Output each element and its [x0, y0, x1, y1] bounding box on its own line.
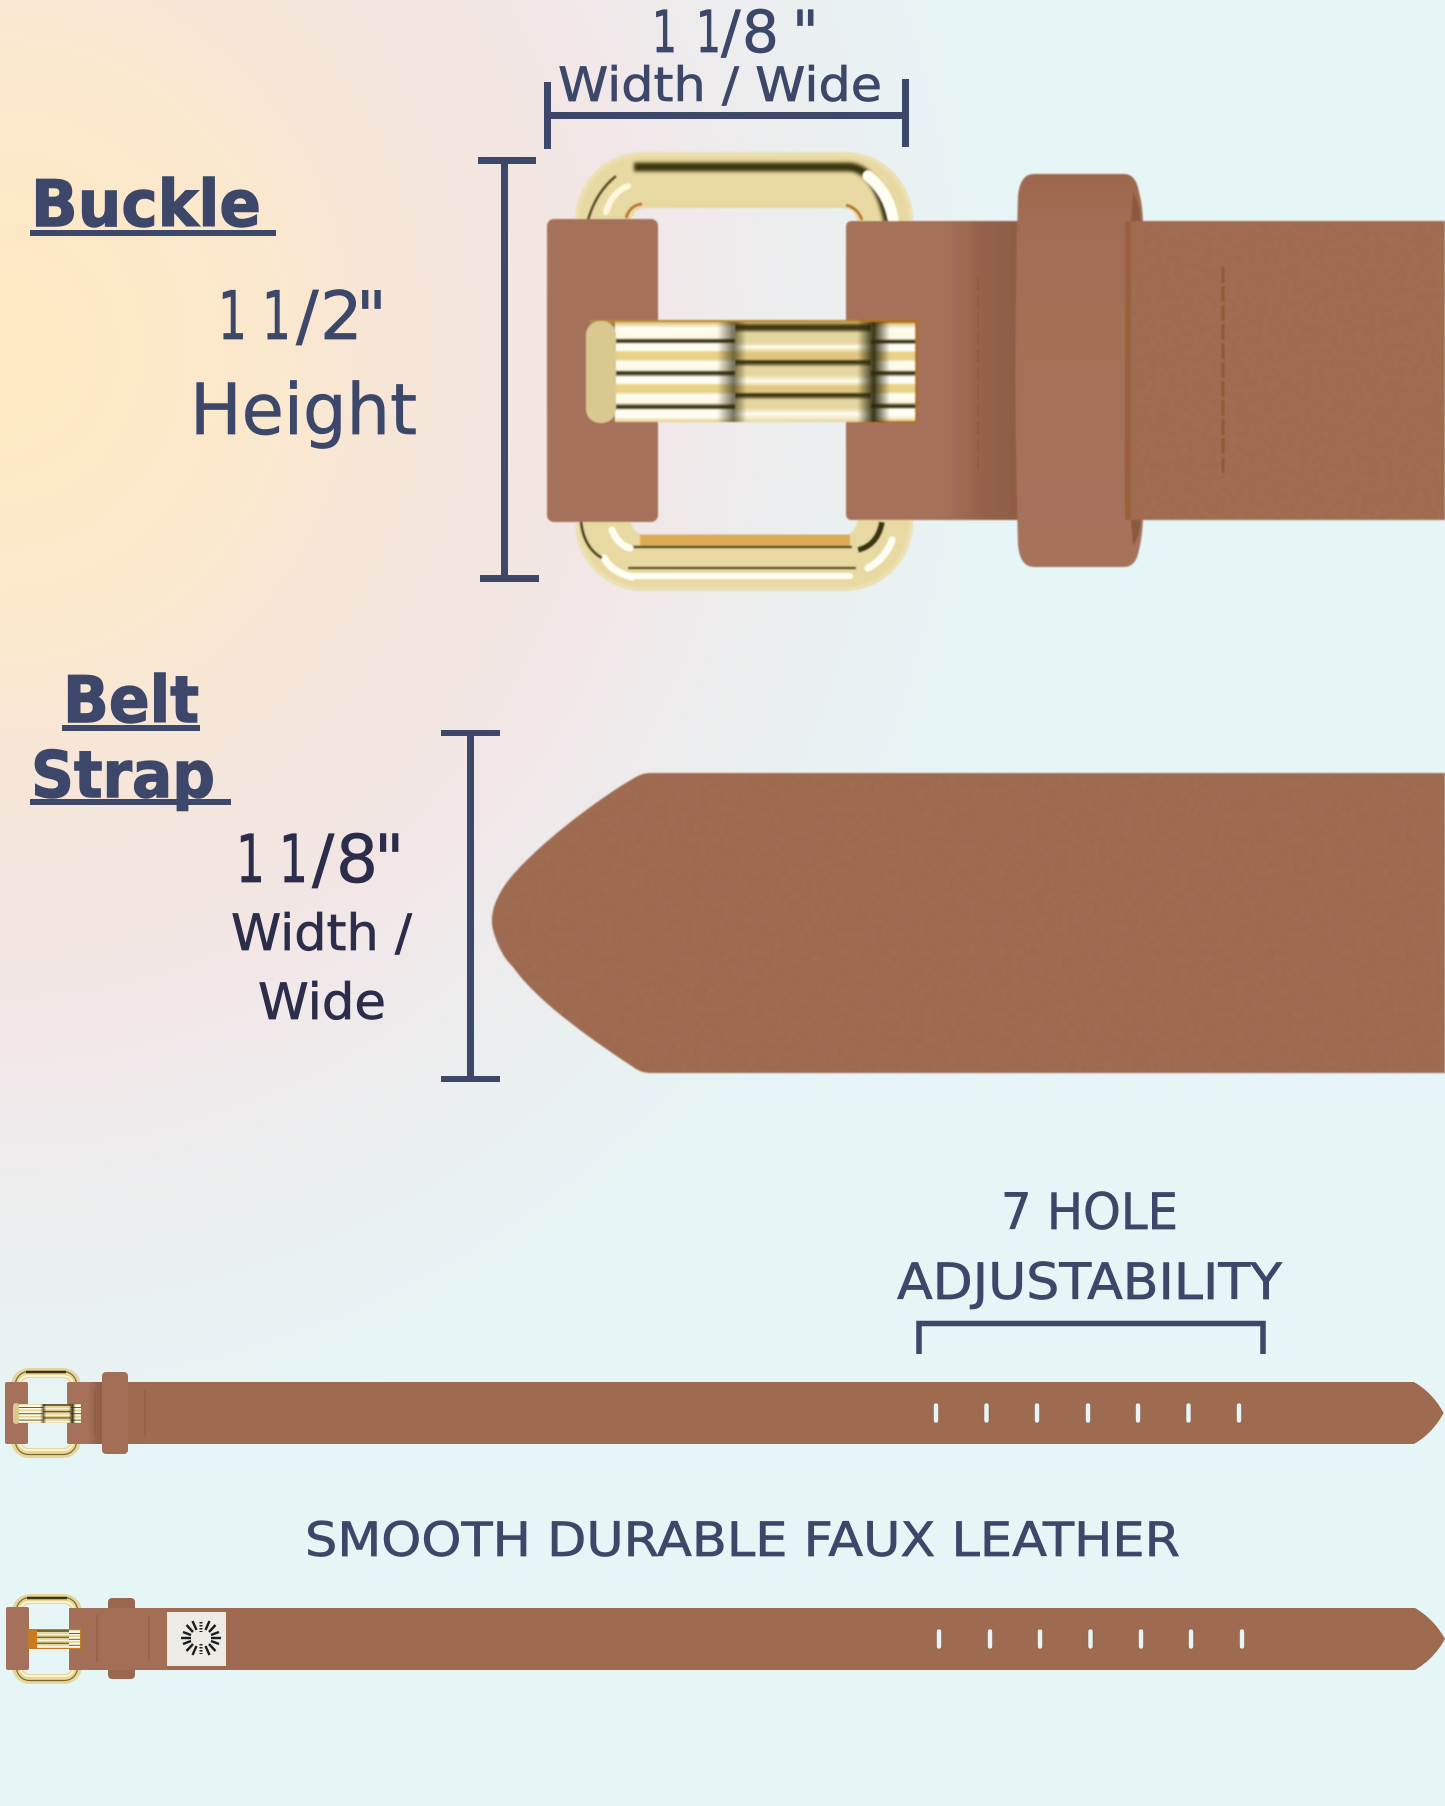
buckle width label	[558, 0, 882, 113]
brand label with sunburst	[167, 1612, 226, 1666]
keeper	[102, 1372, 128, 1454]
pin	[28, 1629, 81, 1649]
buckle width label: 1	[696, 0, 721, 66]
label: 7 hole adjustability: 7 HOLE	[1001, 1183, 1178, 1241]
keeper loop	[1016, 174, 1143, 567]
heading: Belt Strap: Belt	[63, 664, 199, 738]
belt strap width label: Width /	[231, 904, 412, 962]
strap with pointed tip	[126, 1382, 1444, 1444]
keeper behind strap	[108, 1598, 135, 1679]
pin	[13, 1403, 82, 1424]
buckle width label: /8	[721, 0, 779, 66]
adjustability bracket	[919, 1324, 1263, 1354]
buckle height bracket	[478, 157, 539, 582]
heading: Belt Strap	[30, 664, 231, 813]
buckle height label: /2"	[296, 277, 387, 355]
gold ring	[577, 154, 911, 589]
belt strap width label: /8"	[312, 821, 404, 898]
gold ring	[16, 1598, 78, 1680]
seven holes	[936, 1629, 1244, 1649]
label: 7 hole adjustability	[897, 1183, 1282, 1311]
large belt strap tip	[492, 773, 1445, 1073]
belt strap width label: Wide	[258, 973, 386, 1031]
ribbed pin	[586, 319, 918, 423]
buckle height label: 1	[262, 277, 291, 355]
buckle width label: "	[792, 0, 819, 66]
strap piece over ring	[67, 1382, 105, 1444]
small belt: back	[6, 1598, 1445, 1680]
width bracket	[544, 79, 909, 149]
heading: Belt Strap: Strap	[31, 739, 215, 813]
belt strap width bracket	[441, 730, 500, 1082]
caption: smooth durable faux leather: SMOOTH DURABLE FAUX LEATHER	[305, 1513, 1180, 1568]
stitching	[97, 1615, 149, 1662]
belt strap width label: 1	[236, 821, 265, 898]
left loop	[5, 1382, 28, 1444]
strap passing out of keeper	[1125, 221, 1445, 520]
gold ring	[16, 1372, 76, 1454]
buckle height label	[190, 277, 417, 451]
left leather loop	[547, 219, 658, 522]
belt strap width label	[231, 821, 412, 1031]
buckle height label: Height	[190, 369, 417, 451]
small belt: front	[5, 1372, 1444, 1454]
heading: Buckle: Buckle	[31, 168, 261, 242]
left loop	[6, 1607, 29, 1670]
large buckle illustration	[547, 154, 1445, 589]
buckle height label: 1	[218, 277, 247, 355]
buckle width label: Width / Wide	[558, 58, 882, 113]
stitching	[95, 1390, 145, 1437]
seven holes	[934, 1403, 1242, 1423]
label: 7 hole adjustability: ADJUSTABILITY	[897, 1253, 1282, 1311]
strap piece right of ring	[846, 221, 1020, 520]
buckle width label: 1	[652, 0, 677, 66]
strap with pointed tip	[69, 1608, 1445, 1670]
belt strap width label: 1	[279, 821, 308, 898]
